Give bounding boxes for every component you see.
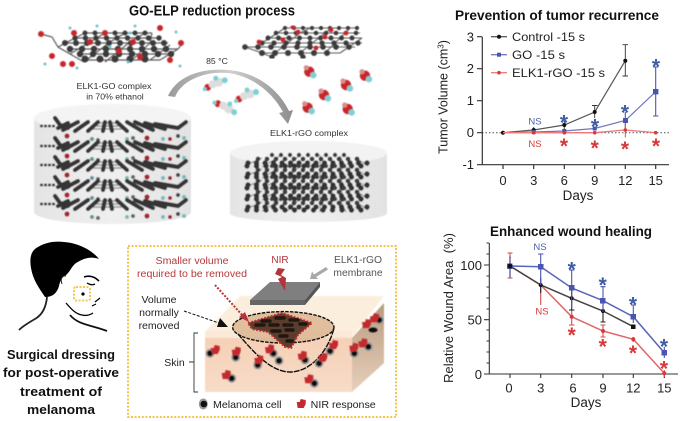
series: control [503,45,628,133]
y tick labels [460,258,482,382]
significance marks: NS [528,139,542,150]
panel: dotted box with skin diagram [128,246,396,417]
y tick labels: -1 [462,157,474,172]
significance marks: * [660,336,669,358]
significance marks: * [660,358,669,380]
y tick labels: 0 [467,125,474,140]
axes [484,243,678,378]
y tick labels [462,30,474,172]
graphene oxide sheet [41,26,182,68]
y axis title: Relative Wound Area (%) [442,233,456,383]
y axis title: ) [436,40,450,44]
series: control [510,257,636,329]
label: NIR: NIR [271,255,289,266]
x tick labels: 9 [599,380,607,396]
significance marks: * [599,274,608,297]
significance marks: * [652,56,661,78]
x tick labels [499,173,663,188]
significance marks: * [591,137,600,160]
significance marks: NS [528,116,542,128]
x tick labels: 12 [618,173,633,188]
series: ELK1-rGO [508,253,664,377]
molecules: ethanol [203,76,259,122]
significance marks: * [621,138,630,161]
legend: GO: GO -15 s [512,48,565,62]
x tick labels: 15 [657,380,672,396]
label: ELK1-rGO membrane: membrane [333,268,383,279]
label: ELK1-GO complex: ELK1-GO complex [76,81,152,91]
significance marks: * [568,258,577,282]
y axis title: Tumor Volume (cm [436,49,450,154]
chart: tumor volume [436,30,669,203]
x tick labels: 12 [626,380,641,396]
caption: surgical dressing: treatment of [20,384,103,399]
tumor region [248,313,312,348]
significance marks: * [652,135,661,158]
legend: ELK1-rGO: ELK1-rGO -15 s [512,66,605,80]
melanoma cells [206,316,384,388]
NIR responses [211,313,379,383]
significance marks: * [629,294,638,316]
y tick labels: 3 [467,30,474,44]
legend: GO [491,48,565,62]
caption: surgical dressing: melanoma [27,402,96,417]
significance marks: * [568,324,577,347]
reduced graphene oxide sheet [245,27,362,57]
axes [477,37,669,169]
label: volume normally removed [139,294,180,332]
significance marks: * [560,112,569,134]
label: 85 °C: 85 °C [206,56,228,66]
caption: surgical dressing: Surgical dressing [7,347,115,362]
label: ELK1-rGO complex: ELK1-rGO complex [270,128,349,138]
heading: prevention of tumor recurrence: Prevention of tumor recurrence [455,8,659,23]
label: smaller volume: required to be removed [137,269,247,280]
x tick labels: 3 [530,173,537,188]
x tick labels: 6 [561,173,568,188]
y tick labels: 100 [460,258,482,273]
y tick labels: 50 [468,312,482,328]
arrow: gray to membrane [310,267,328,279]
caption: surgical dressing: for post-operative [3,365,119,380]
series: GO [507,254,667,358]
arrow: reduction [168,70,293,124]
x tick labels: 15 [648,173,663,188]
cylinder: ELK1-GO complex stack [34,104,191,224]
membrane [250,282,320,305]
chart: relative wound area [442,233,678,410]
legend: melanoma cell: Melanoma cell [213,400,282,411]
icon: head silhouette with marked lesion [19,242,107,331]
legend: NIR response: NIR response [311,400,376,411]
label: smaller volume [137,256,247,280]
significance marks: * [591,116,600,138]
x axis title: Days [571,395,602,410]
legend: melanoma cell [199,398,282,411]
significance marks: * [621,102,630,124]
significance marks: * [629,342,638,365]
significance marks: NS [533,242,547,253]
label: volume normally removed: Volume [141,294,177,306]
arrow: black dashed [184,311,228,327]
heading: enhanced wound healing: Enhanced wound healing [490,224,652,239]
y tick labels: 2 [467,61,474,76]
significance marks [533,242,669,380]
icon: NIR bolt [275,268,286,291]
zero reference line [482,132,669,134]
label: smaller volume: Smaller volume [156,256,228,267]
label: ELK1-rGO membrane: ELK1-rGO [334,255,382,266]
skin block [205,296,384,392]
y tick labels: 0 [475,367,482,382]
x axis title: Days [563,188,594,203]
label: volume normally removed: removed [139,320,180,332]
significance marks [528,56,661,161]
cylinder: ELK1-rGO complex stack [230,141,387,222]
caption: surgical dressing [3,347,119,417]
series: GO [503,67,658,134]
molecules: water [302,65,372,116]
label: ELK1-rGO membrane [333,255,383,279]
y axis title: 3 [436,44,446,49]
label: volume normally removed: normally [139,307,180,319]
x tick labels: 6 [569,380,577,396]
x tick labels: 9 [591,173,598,188]
significance marks: * [599,336,608,358]
x tick labels: 3 [537,380,544,396]
label: skin bracket [164,333,198,392]
significance marks: * [560,135,569,158]
legend: Control: Control -15 s [512,30,585,44]
y tick labels: 1 [467,93,474,108]
x tick labels [505,380,672,396]
volume normally removed outline [233,312,334,372]
arrow: red dotted [215,285,249,322]
title: GO-ELP reduction process: GO-ELP reduction process [129,4,295,20]
significance marks: NS [535,306,549,318]
label: skin bracket: Skin [164,357,185,369]
series: ELK1-rGO [503,123,656,138]
x tick labels: 0 [499,173,507,188]
label: in 70% ethanol: in 70% ethanol [86,92,144,102]
x tick labels: 0 [505,380,513,396]
